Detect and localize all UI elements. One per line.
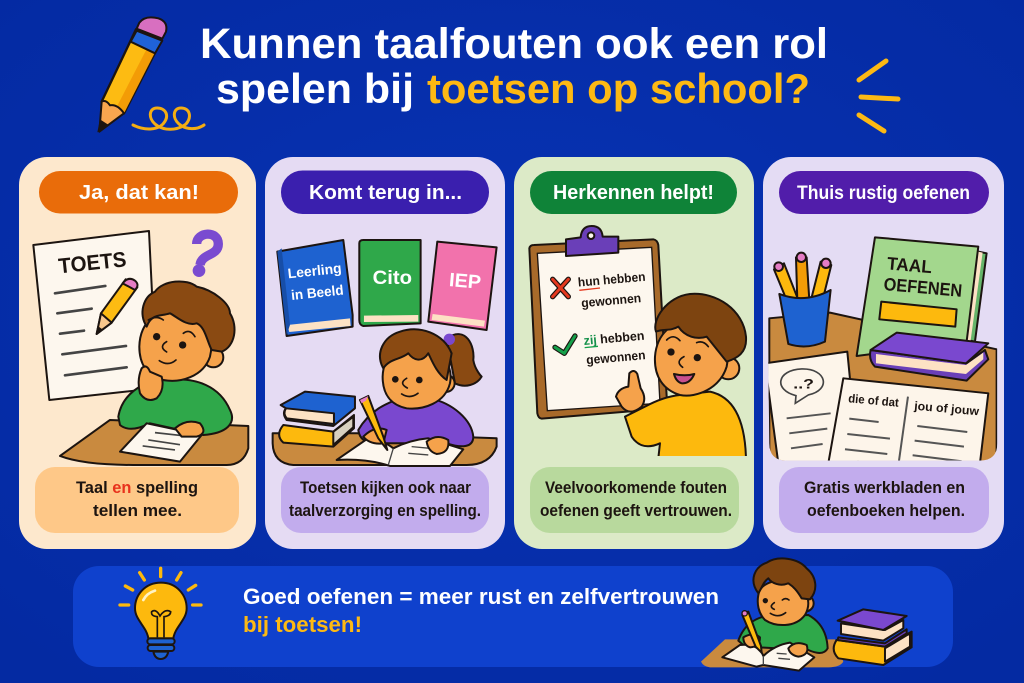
illustration: clipboard and pointing boy: gewonnen xyxy=(581,291,642,310)
illustration: studying boy with books xyxy=(701,558,912,671)
title: toetsen op school? xyxy=(427,65,810,112)
icon: green book xyxy=(359,240,421,326)
heading: Komt terug in: Komt terug in... xyxy=(309,182,462,204)
text box: Gratis werkbladen: Gratis werkbladen en xyxy=(804,478,965,497)
icon: writing pencil xyxy=(360,396,387,450)
illustration: clipboard and pointing boy: gewonnen xyxy=(586,348,646,367)
icon: green check xyxy=(555,336,575,353)
text box: Veelvoorkomende fouten xyxy=(530,467,739,533)
panel: Komt terug in xyxy=(265,157,505,549)
icon: pink book xyxy=(428,242,497,330)
illustration: thinking boy with test xyxy=(33,231,248,465)
icon: green workbook: TAAL xyxy=(886,253,933,277)
icon: stack of books xyxy=(279,392,355,447)
heading: Herkennen helpt xyxy=(530,171,737,214)
icon: swirl under pencil xyxy=(133,108,204,129)
icon: green workbook: OEFENEN xyxy=(883,274,963,301)
heading: Thuis rustig oefenen xyxy=(779,171,989,214)
banner text xyxy=(243,584,719,637)
icon: clipboard xyxy=(529,226,667,419)
panel: Thuis rustig oefenen xyxy=(763,157,1004,549)
banner text: Goed oefenen = meer rust en zelfvertrouwen xyxy=(243,584,719,609)
heading: Ja, dat kan: Ja, dat kan! xyxy=(79,182,199,204)
icon: green book: Cito xyxy=(373,268,412,289)
heading: Herkennen helpt: Herkennen helpt! xyxy=(553,182,714,204)
icon: question mark xyxy=(193,234,218,277)
text box: Taal en spelling xyxy=(35,467,239,533)
icon: paper with speech bubble: ..? xyxy=(793,376,814,392)
panel: Herkennen helpt xyxy=(514,157,754,549)
icon: pointing hand xyxy=(616,371,644,412)
icon: paper with speech bubble xyxy=(765,352,858,463)
icon: blue book: Leerling xyxy=(287,260,342,281)
icon: pencil xyxy=(97,17,166,132)
icon: book stack xyxy=(834,609,912,665)
illustration: clipboard and pointing boy: zij hebben xyxy=(583,329,645,348)
text box: Toetsen kijken xyxy=(281,467,489,533)
text box: Taal en spelling: Taal en spelling xyxy=(76,478,198,497)
title: spelen bij xyxy=(216,65,414,112)
heading: Thuis rustig oefenen: Thuis rustig oefenen xyxy=(797,183,970,204)
icon: blue book xyxy=(277,240,353,336)
illustration: books and writing girl xyxy=(273,240,497,466)
icon: purple book xyxy=(870,333,988,381)
icon: green workbook xyxy=(857,237,987,356)
banner text: bij toetsen! xyxy=(243,612,362,637)
title xyxy=(200,20,828,112)
icon: pencil cup xyxy=(774,253,831,346)
banner xyxy=(73,558,953,671)
heading: Ja, dat kan xyxy=(39,171,238,214)
text box: Veelvoorkomende fouten: oefenen geeft vertrouwen. xyxy=(540,501,732,520)
icon: open workbook xyxy=(828,378,988,463)
icon: blue book: in Beeld xyxy=(290,282,344,303)
text box: Veelvoorkomende fouten: Veelvoorkomende fouten xyxy=(545,478,727,497)
illustration: clipboard and pointing boy xyxy=(529,226,746,458)
illustration: clipboard and pointing boy: hun hebben xyxy=(577,270,646,290)
icon: yellow rays xyxy=(859,61,898,131)
icon: open workbook: jou of jouw xyxy=(913,399,980,418)
text box: Toetsen kijken: taalverzorging en spelling. xyxy=(289,501,481,520)
text box: Toetsen kijken: Toetsen kijken ook naar xyxy=(300,478,471,497)
icon: lightbulb xyxy=(120,568,201,659)
title: Kunnen taalfouten ook een rol xyxy=(200,20,828,68)
icon: red cross xyxy=(553,279,568,297)
icon: open workbook: die of dat xyxy=(848,391,899,410)
icon: pink book: IEP xyxy=(448,270,482,294)
panel: Ja, dat kan xyxy=(19,157,256,549)
illustration: thinking boy with test: TOETS xyxy=(57,247,127,278)
illustration: desk with workbooks xyxy=(765,237,997,463)
heading: Komt terug in xyxy=(281,170,489,214)
text box: Gratis werkbladen: oefenboeken helpen. xyxy=(807,501,965,520)
text box: Taal en spelling: tellen mee. xyxy=(93,501,182,520)
text box: Gratis werkbladen xyxy=(779,467,989,533)
